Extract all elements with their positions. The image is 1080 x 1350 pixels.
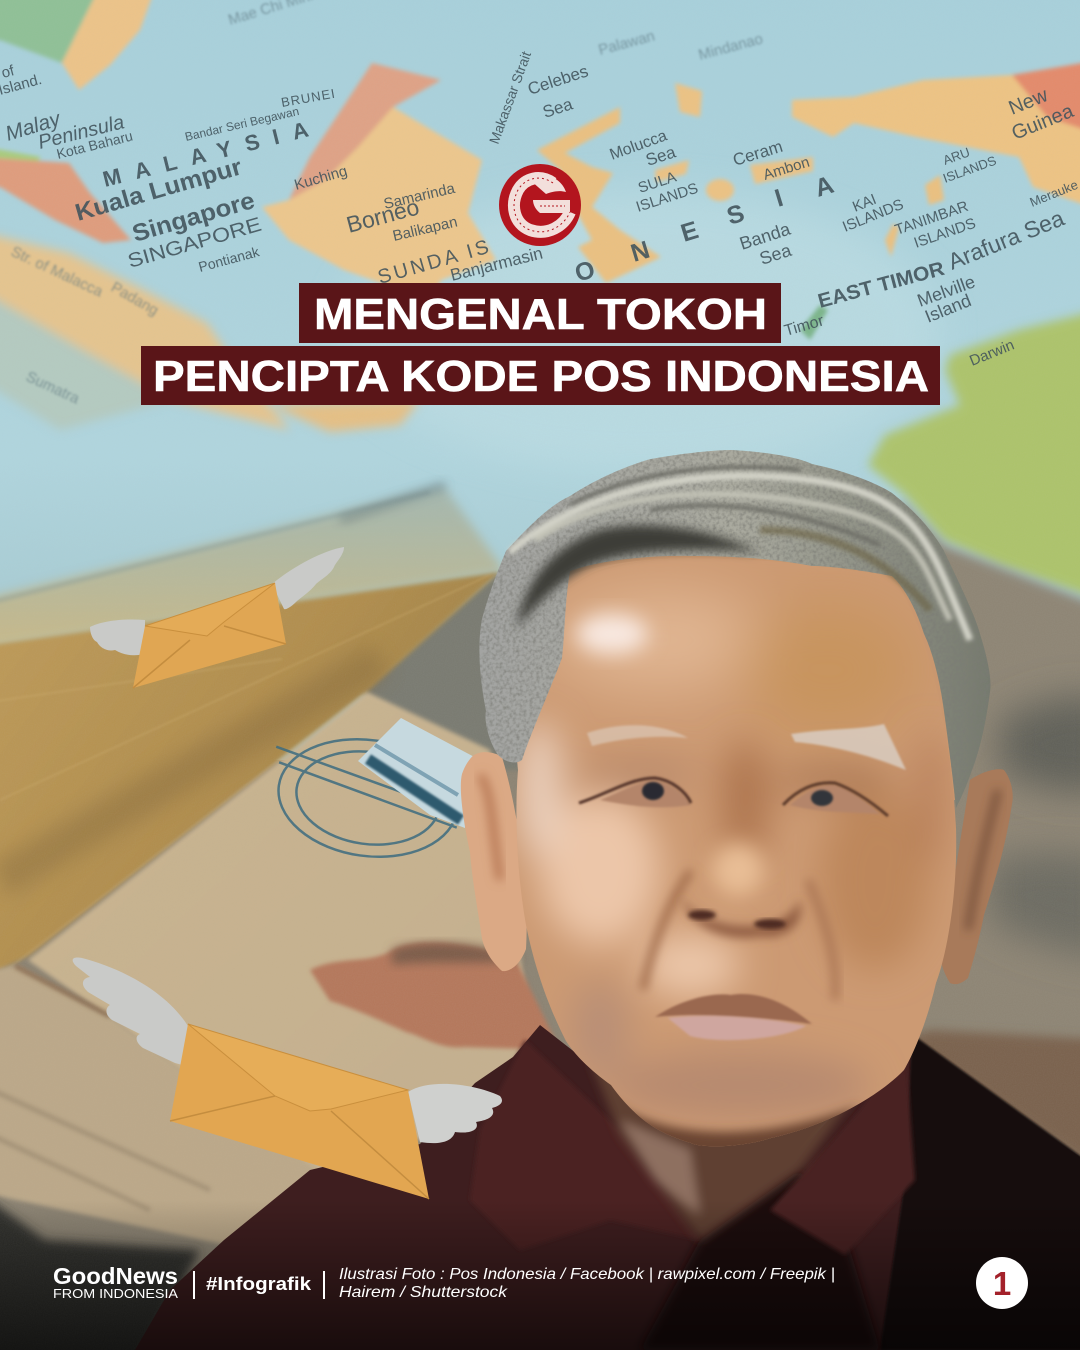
envelope body	[170, 1024, 429, 1199]
map background: Balikapan	[391, 214, 459, 245]
map background: SULA	[636, 169, 679, 197]
wing left	[73, 957, 188, 1066]
map background: Sea	[643, 142, 679, 170]
map background: Kota Baharu	[55, 128, 134, 162]
blurred distant map labels: Sumatra	[23, 368, 82, 408]
map background: Kuching	[292, 163, 349, 194]
map background: A	[812, 171, 837, 203]
eyebrows	[587, 724, 906, 770]
map background: SINGAPORE	[125, 214, 264, 273]
blurred distant map labels: Palawan	[597, 28, 657, 59]
right side blurred background	[900, 500, 1080, 1180]
map background: S	[724, 199, 748, 231]
map background: Melville	[915, 271, 978, 311]
page number	[976, 1257, 1028, 1309]
photo credits: Ilustrasi Foto : Pos Indonesia / Facebook | rawpixel.com / Freepik |	[339, 1266, 835, 1283]
map background: ISLANDS	[634, 180, 700, 216]
map background: E	[678, 216, 702, 248]
map background: of	[0, 62, 17, 82]
shirt	[135, 1025, 1080, 1350]
map background: EAST TIMOR	[816, 258, 947, 313]
envelope body	[133, 583, 286, 688]
nose	[680, 844, 801, 937]
hashtag: #Infografik	[206, 1274, 312, 1294]
large flying envelope	[73, 957, 502, 1199]
small flying envelope	[90, 547, 344, 688]
left ear	[461, 752, 527, 971]
map background: ARU	[941, 144, 972, 168]
map background: Singapore	[129, 187, 258, 248]
map background: Malay	[3, 107, 64, 146]
map background: Pontianak	[197, 243, 262, 275]
page number: 1	[993, 1265, 1011, 1302]
map background	[0, 0, 1080, 760]
map background: Borneo	[344, 194, 422, 238]
map background: Banda	[737, 218, 794, 254]
map background: Peninsula	[36, 111, 126, 154]
footer shade	[0, 1200, 1080, 1350]
wing right	[408, 1084, 502, 1143]
wing left	[90, 619, 145, 655]
divider	[323, 1271, 325, 1299]
blurred distant map labels: Mindanao	[697, 30, 765, 64]
map background: ISLANDS	[840, 196, 906, 236]
photo credits: Hairem / Shutterstock	[339, 1284, 508, 1301]
hair	[479, 450, 991, 808]
map background: TANIMBAR	[893, 198, 971, 239]
map background: Arafura Sea	[944, 204, 1068, 275]
right ear	[941, 769, 1013, 984]
divider	[193, 1271, 195, 1299]
map background: Guinea	[1009, 100, 1077, 145]
map background: Darwin	[967, 336, 1017, 370]
map background: Molucca	[608, 127, 669, 164]
envelope flap	[188, 1024, 408, 1111]
face	[516, 560, 956, 1146]
map background: N	[628, 236, 653, 268]
map background: Merauke	[1028, 177, 1080, 210]
title line 1: MENGENAL TOKOH	[314, 290, 767, 339]
map background: I	[772, 184, 786, 213]
photo credits	[339, 1266, 835, 1301]
title line 2: PENCIPTA KODE POS INDONESIA	[153, 352, 929, 401]
neck	[590, 1060, 860, 1240]
wing right	[272, 547, 344, 609]
map background: MALAYSIA	[100, 113, 324, 192]
map background: Sea	[757, 240, 795, 269]
map background: Kuala Lumpur	[72, 153, 245, 227]
map background: Banjarmasin	[448, 244, 545, 285]
G emblem	[514, 173, 570, 232]
map background: Sea	[540, 94, 576, 122]
map background: Celebes	[525, 61, 591, 99]
envelope flap	[145, 583, 275, 636]
map background: Timor	[782, 312, 826, 340]
logo badge	[499, 164, 581, 246]
footer	[53, 1257, 1028, 1309]
eyes	[579, 778, 888, 816]
blurred distant map labels: Str. of Malacca	[8, 243, 106, 301]
brand logo	[53, 1263, 179, 1301]
map background: SUNDA IS	[375, 235, 494, 289]
map background: Ceram	[731, 137, 785, 170]
map background: ISLANDS	[941, 153, 999, 186]
dark hair streak	[516, 525, 760, 628]
map background: New	[1006, 84, 1051, 120]
map background: KAI	[850, 191, 879, 216]
portrait of man	[135, 450, 1080, 1350]
head base behind hair	[530, 530, 955, 800]
brand logo: FROM INDONESIA	[53, 1287, 179, 1301]
map background: ISLANDS	[912, 215, 978, 252]
mouth	[655, 994, 812, 1040]
map background: Samarinda	[382, 180, 457, 213]
brand logo: GoodNews	[53, 1263, 178, 1289]
postage stamp and postmark	[263, 718, 480, 868]
hair strands	[510, 467, 970, 640]
blurred distant map labels	[8, 0, 765, 408]
map background: Ambon	[761, 154, 812, 184]
blurred distant map labels: Padang	[108, 279, 161, 319]
map background: BRUNEI	[280, 86, 337, 110]
map background: Makassar Strait	[486, 49, 534, 146]
title	[141, 283, 940, 405]
map background: Island	[922, 290, 974, 327]
map background: O	[572, 255, 598, 288]
map background: Bandar Seri Begawan	[184, 104, 300, 144]
